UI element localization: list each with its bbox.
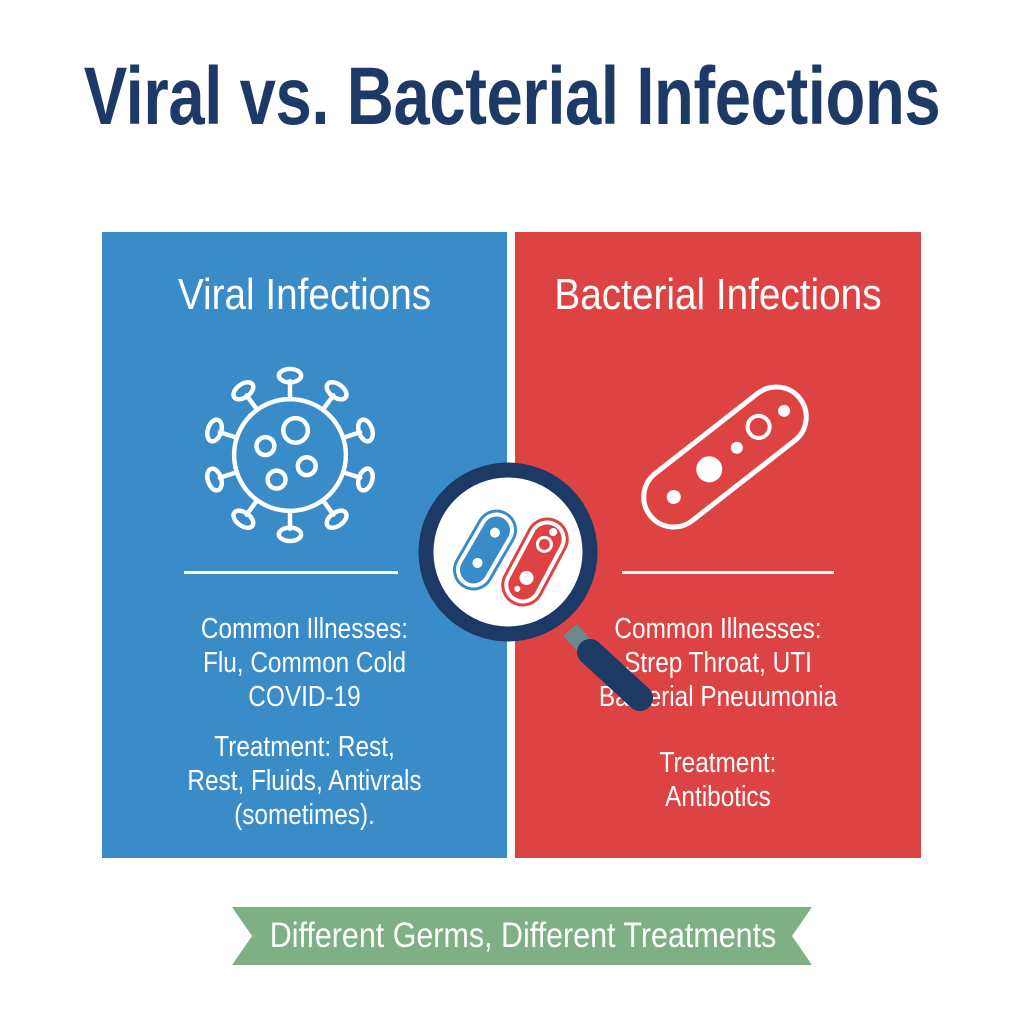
icon: virus xyxy=(205,366,375,544)
panel: viral xyxy=(102,232,507,858)
text: bacterial illnesses: Strep Throat, UTI xyxy=(624,647,812,679)
heading: bacterial: Bacterial Infections xyxy=(554,270,882,319)
text: viral illnesses: COVID-19 xyxy=(248,681,361,713)
text: viral treatment: Rest, Fluids, Antivrals xyxy=(187,765,422,797)
text: bacterial treatment xyxy=(660,747,776,813)
text: viral treatment xyxy=(187,731,422,831)
text: bacterial treatment: Treatment: xyxy=(660,747,776,779)
icon: bacterium xyxy=(641,384,809,530)
banner xyxy=(232,907,812,965)
text: viral treatment: Treatment: Rest, xyxy=(214,731,395,763)
text: viral treatment: (sometimes). xyxy=(234,799,375,831)
text: bacterial treatment: Antibotics xyxy=(665,781,771,813)
icon: magnifying glass xyxy=(418,462,653,711)
text: bacterial illnesses: Bacterial Pneuumonia xyxy=(599,681,837,713)
banner: Different Germs, Different Treatments xyxy=(270,916,776,955)
heading: viral: Viral Infections xyxy=(178,270,431,319)
title: Viral vs. Bacterial Infections xyxy=(84,51,940,142)
text: viral illnesses xyxy=(201,613,408,713)
text: bacterial illnesses: Common Illnesses: xyxy=(614,613,822,645)
text: viral illnesses: Flu, Common Cold xyxy=(203,647,406,679)
text: bacterial illnesses xyxy=(599,613,838,713)
panel: bacterial xyxy=(515,232,921,858)
text: viral illnesses: Common Illnesses: xyxy=(201,613,408,645)
